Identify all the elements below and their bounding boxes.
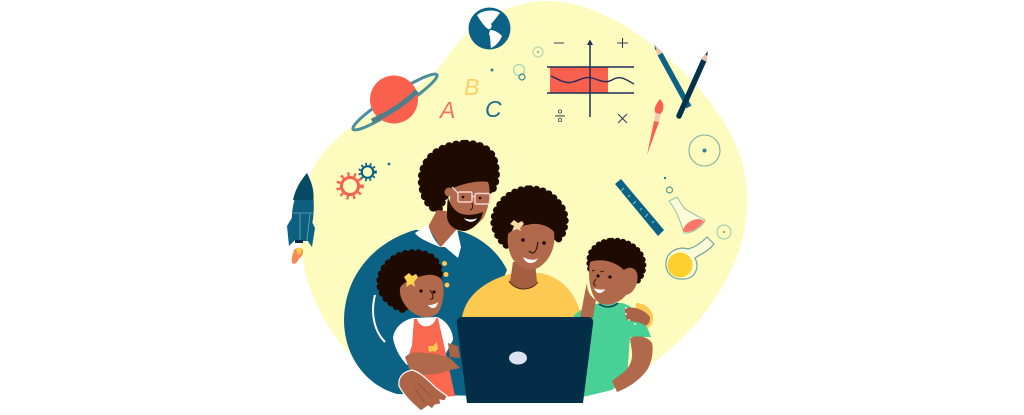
girl face bbox=[400, 275, 444, 317]
girl pinafore bbox=[408, 318, 455, 398]
father neck bbox=[428, 210, 458, 248]
boy hair bbox=[590, 241, 643, 287]
icon: globe bbox=[468, 8, 510, 50]
mother smile bbox=[523, 257, 538, 263]
mother's hand on shoulder bbox=[625, 307, 650, 325]
girl hair bow bbox=[404, 273, 418, 287]
icon: teal gear bbox=[360, 164, 375, 180]
icon: red gear bbox=[338, 174, 362, 198]
father hair bbox=[422, 144, 496, 210]
laptop bbox=[457, 317, 593, 403]
sweater highlight bbox=[373, 295, 385, 342]
letters: A B C bbox=[438, 74, 502, 123]
girl hair bbox=[380, 253, 439, 310]
icon: target circle bbox=[689, 135, 720, 166]
mother hair clip bbox=[510, 220, 524, 231]
icon: ringed planet bbox=[349, 68, 441, 136]
girl shirt bbox=[393, 317, 453, 365]
icon: ruler bbox=[615, 179, 664, 236]
letters: A B C: A bbox=[438, 97, 455, 123]
father sweater bbox=[344, 230, 507, 396]
girl bbox=[380, 253, 460, 398]
girl smile bbox=[428, 302, 438, 308]
father's hand bbox=[399, 370, 447, 411]
father face bbox=[449, 181, 490, 226]
icon: paint brush bbox=[647, 99, 663, 155]
boy bbox=[573, 241, 653, 397]
boy collar bbox=[599, 303, 618, 307]
mother's sleeve behind boy bbox=[634, 303, 653, 328]
icon: teal pencil bbox=[654, 44, 689, 107]
laptop logo bbox=[509, 352, 527, 364]
mother shirt bbox=[462, 273, 582, 318]
letters: A B C: B bbox=[464, 74, 479, 100]
boy face bbox=[589, 260, 638, 305]
mother hair bbox=[494, 189, 565, 247]
father beard bbox=[447, 197, 483, 231]
math graph bbox=[547, 38, 634, 123]
girl arm bbox=[405, 352, 460, 375]
father bbox=[344, 144, 507, 396]
father glasses bbox=[452, 187, 490, 204]
boy arm and hand bbox=[612, 336, 653, 392]
girl far arm bbox=[448, 343, 460, 358]
mother neck bbox=[510, 262, 537, 289]
icon: conical flask bbox=[669, 197, 705, 233]
icon: round flask bbox=[666, 237, 714, 279]
icon: navy pencil bbox=[679, 51, 708, 116]
mother face bbox=[508, 224, 554, 269]
boy shirt bbox=[573, 303, 651, 397]
boy chin hand bbox=[580, 283, 596, 318]
yellow background blob bbox=[301, 1, 747, 397]
pony badge bbox=[428, 342, 438, 352]
icon: rocket bbox=[287, 173, 315, 264]
father smile bbox=[464, 218, 477, 222]
letters: A B C: C bbox=[485, 96, 502, 122]
boy smile bbox=[594, 288, 605, 293]
sweater buttons bbox=[442, 261, 450, 288]
small bubbles and dots bbox=[388, 47, 731, 239]
collar bbox=[415, 224, 461, 258]
mother bbox=[462, 189, 582, 318]
